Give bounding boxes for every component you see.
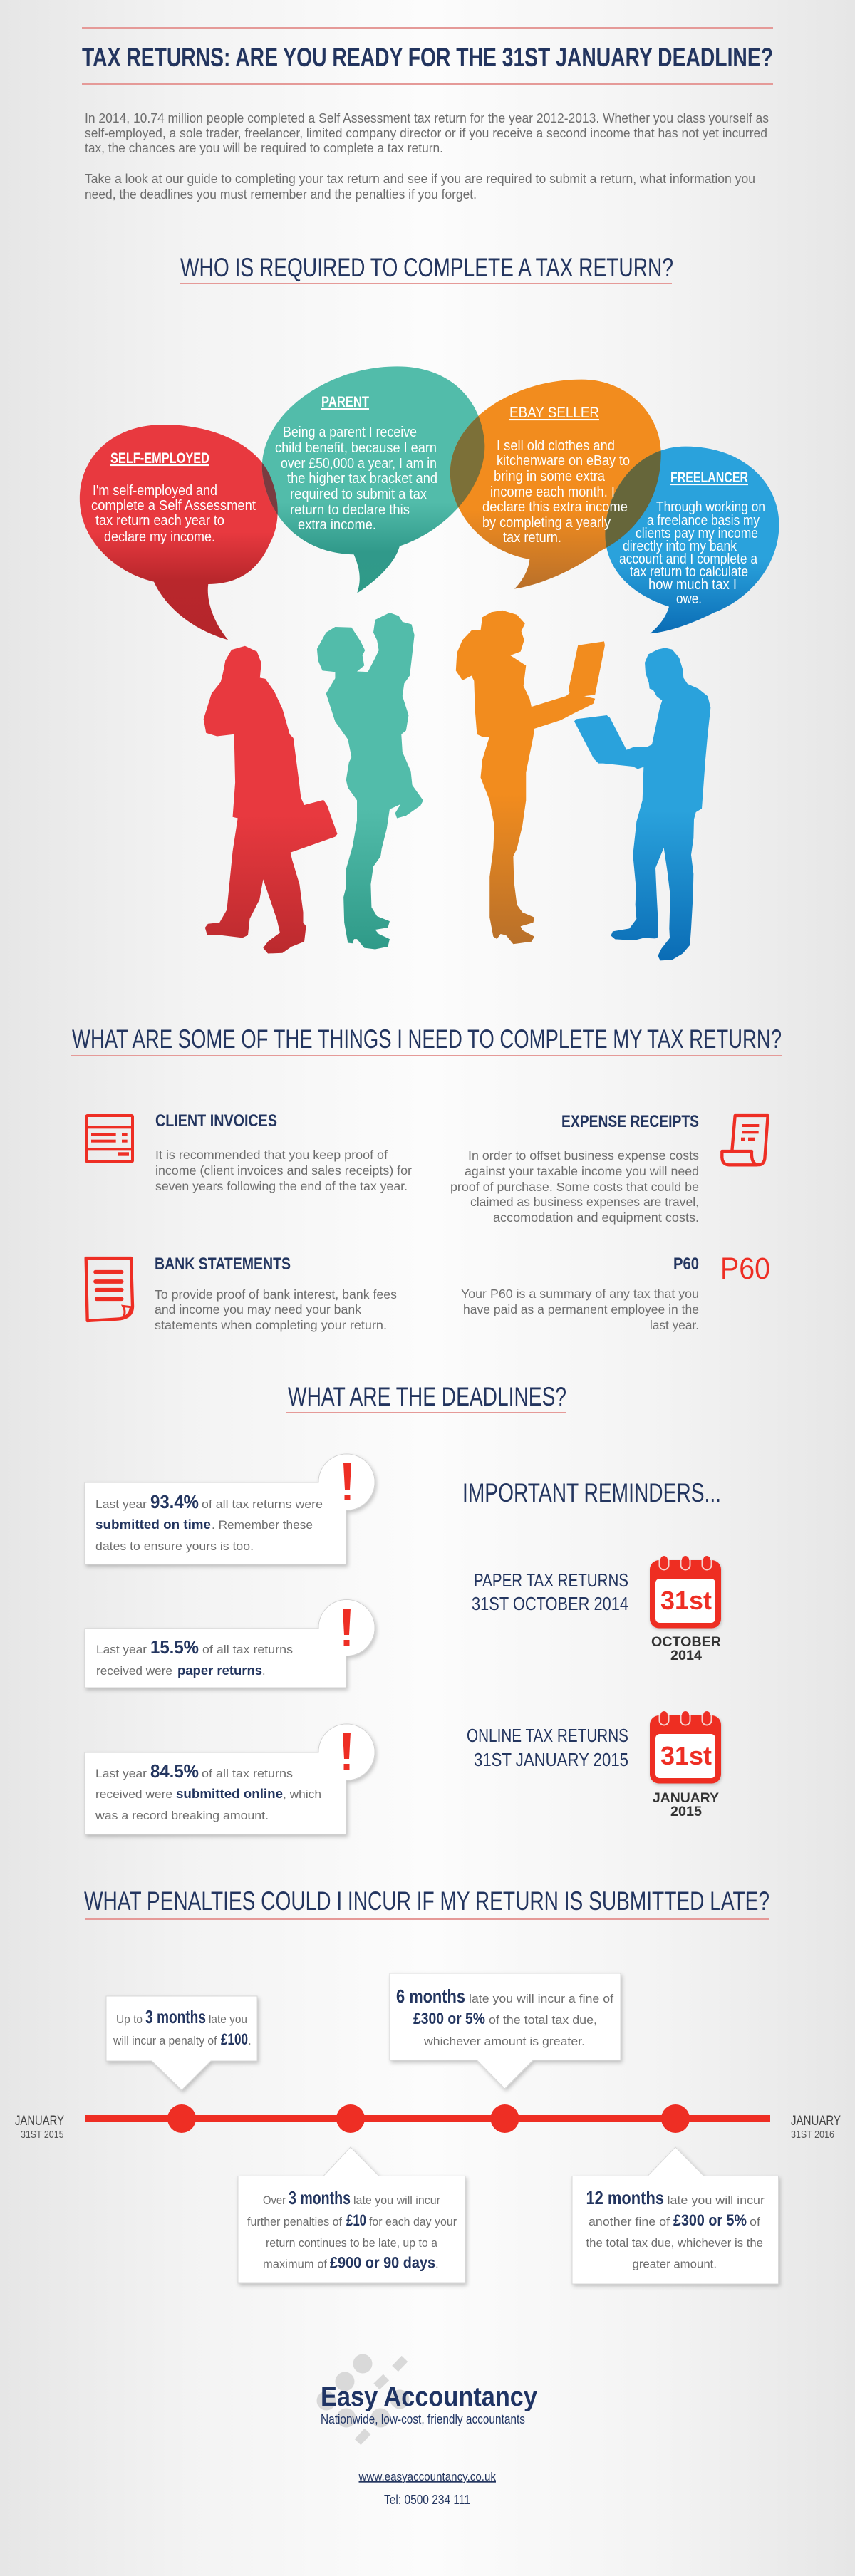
text: online tax returns date: 31ST JANUARY 2015 (474, 1749, 628, 1770)
heading: deadlines: WHAT ARE THE DEADLINES? (288, 1382, 566, 1411)
block: p60: last year. (650, 1318, 699, 1332)
bubble text: ebay seller: declare this extra income (482, 499, 628, 515)
icon: calendar january: JANUARY (653, 1791, 719, 1806)
bubble text: parent: Being a parent I receive (283, 425, 417, 440)
speech bubble shapes (80, 366, 779, 640)
callout: paper returns: . (262, 1665, 266, 1678)
callout: submitted online: received were (95, 1788, 172, 1801)
timeline (85, 2104, 770, 2133)
timeline start label: 31ST 2015 (21, 2129, 64, 2141)
callout: up to 3 months (106, 1996, 257, 2090)
callout: submitted online (85, 1724, 375, 1834)
bubble text: freelancer: owe. (676, 591, 702, 607)
timeline end label: 31ST 2016 (791, 2129, 834, 2141)
block: expense receipts: claimed as business expenses are travel, (470, 1195, 699, 1209)
bubble text: parent (275, 394, 437, 533)
bubble text: freelancer: directly into my bank (623, 539, 737, 554)
block: p60: have paid as a permanent employee in the (463, 1302, 699, 1316)
callout: 12 months: the total tax due, whichever is the (586, 2236, 763, 2250)
block: expense receipts (450, 1112, 699, 1225)
block: p60: P60 (673, 1255, 699, 1274)
block: p60: Your P60 is a summary of any tax that you (461, 1287, 699, 1301)
bubble text: ebay seller: by completing a yearly (482, 515, 611, 531)
icon: receipt (722, 1116, 768, 1165)
callout: over 3 months: 3 months (289, 2187, 351, 2208)
callout: over 3 months: maximum of (263, 2257, 327, 2271)
callout: over 3 months (238, 2147, 465, 2283)
block: bank statements: and income you may need your bank (155, 1302, 361, 1316)
callout: up to 3 months: £100 (221, 2030, 248, 2048)
icon: p60: P60 (720, 1252, 770, 1286)
silhouette: man with briefcase (204, 646, 337, 954)
bubble text: ebay seller: bring in some extra (494, 469, 606, 484)
block: p60 (461, 1255, 699, 1332)
callout: submitted on time: dates to ensure yours is too. (95, 1540, 254, 1553)
callout: over 3 months: Over (263, 2193, 286, 2207)
callout: 6 months: of the total tax due, (489, 2013, 597, 2027)
callout: up to 3 months: late you (209, 2012, 247, 2026)
block: expense receipts: In order to offset business expense costs (468, 1148, 699, 1163)
callout: up to 3 months: 3 months (145, 2006, 206, 2027)
callout: up to 3 months: will incur a penalty of (113, 2034, 217, 2047)
callout: submitted online: submitted online (176, 1787, 283, 1801)
icon: calendar january: 2015 (670, 1804, 702, 1819)
callout: 6 months: whichever amount is greater. (423, 2035, 585, 2048)
bubble text: freelancer: a freelance basis my (647, 513, 760, 529)
callout: 12 months: £300 or 5% (673, 2211, 747, 2229)
block: bank statements: To provide proof of bank interest, bank fees (155, 1287, 397, 1302)
callout: up to 3 months: . (248, 2034, 252, 2047)
block: client invoices (155, 1111, 412, 1193)
bubble text: freelancer: how much tax I (648, 577, 737, 593)
timeline start label: JANUARY (15, 2114, 64, 2129)
silhouette: woman with laptop (456, 611, 605, 944)
heading: who is required: WHO IS REQUIRED TO COMPLETE A TAX RETURN? (180, 253, 673, 282)
icon: invoice (86, 1116, 133, 1162)
callout: over 3 months: £900 or 90 days (330, 2254, 435, 2271)
timeline end label (791, 2114, 841, 2141)
block: client invoices: seven years following the end of the tax year. (155, 1179, 408, 1193)
text: online tax returns date: ONLINE TAX RETURNS (467, 1725, 628, 1746)
block: bank statements: statements when completing your return. (155, 1318, 387, 1332)
callout: over 3 months: . (435, 2257, 439, 2271)
bubble text: ebay seller: income each month. I (490, 484, 615, 500)
bubble text: parent: the higher tax bracket and (287, 471, 437, 487)
silhouette: parent holding child (317, 613, 423, 949)
callout: over 3 months: further penalties of (247, 2215, 342, 2228)
bubble text: ebay seller: kitchenware on eBay to (497, 453, 630, 469)
website link: www.easyaccountancy.co.uk (358, 2470, 496, 2483)
block: client invoices: income (client invoices and sales receipts) for (155, 1163, 412, 1178)
callout: paper returns: received were (96, 1665, 172, 1678)
callout: submitted online: Last year (95, 1767, 147, 1780)
bubble text: ebay seller: EBAY SELLER (509, 405, 599, 421)
callout: 12 months: late you will incur (667, 2193, 765, 2207)
callout: over 3 months: return continues to be late, up to a (266, 2236, 437, 2250)
callout: submitted online: was a record breaking amount. (95, 1809, 269, 1822)
text: online tax returns date (467, 1725, 628, 1770)
callout: up to 3 months: Up to (116, 2012, 142, 2026)
callout: 12 months: greater amount. (633, 2257, 717, 2271)
block: expense receipts: accomodation and equipment costs. (493, 1210, 699, 1225)
callout: submitted on time (85, 1454, 375, 1564)
callout: 12 months: 12 months (586, 2187, 664, 2208)
callout: 6 months: 6 months (396, 1985, 465, 2007)
bubble text: ebay seller: I sell old clothes and (497, 438, 615, 454)
icon: calendar october: OCTOBER (651, 1635, 721, 1650)
bubble text: parent: extra income. (298, 517, 376, 533)
icon: calendar january (650, 1711, 721, 1819)
block: bank statements (155, 1255, 397, 1332)
callout: 6 months: £300 or 5% (413, 2010, 485, 2027)
icon: calendar october (650, 1556, 721, 1663)
callout: submitted online: of all tax returns (202, 1767, 293, 1780)
bubble text: parent: child benefit, because I earn (275, 440, 437, 456)
text: paper tax returns date: 31ST OCTOBER 2014 (472, 1593, 628, 1614)
icon: calendar january: 31st (660, 1741, 712, 1770)
block: client invoices: CLIENT INVOICES (155, 1111, 277, 1131)
callout: 12 months (572, 2147, 778, 2284)
bubble text: self-employed: declare my income. (104, 529, 215, 545)
callout: over 3 months: for each day your (369, 2215, 457, 2228)
intro text: need, the deadlines you must remember and the penalties if you forget. (85, 187, 477, 202)
bubble text: parent: over £50,000 a year, I am in (281, 456, 437, 472)
intro text: tax, the chances are you will be required to complete a tax return. (85, 141, 443, 155)
callout: submitted online: 84.5% (150, 1760, 199, 1782)
bubble text: self-employed: complete a Self Assessment (91, 498, 256, 514)
icon: bank statement (86, 1258, 133, 1321)
callout: paper returns: paper returns (177, 1663, 262, 1678)
logo: easy accountancy (316, 2354, 537, 2442)
logo: easy accountancy: Easy Accountancy (321, 2382, 537, 2412)
bubble text: ebay seller (482, 405, 630, 546)
callout: 6 months (390, 1973, 621, 2089)
bubble text: freelancer: Through working on (656, 499, 765, 515)
bubble text: self-employed: SELF-EMPLOYED (110, 450, 209, 467)
callout: over 3 months: £10 (346, 2211, 366, 2229)
bubble text: freelancer: clients pay my income (636, 526, 758, 541)
callout: submitted on time: of all tax returns were (202, 1498, 323, 1511)
timeline end label: JANUARY (791, 2114, 841, 2129)
callout: submitted on time: 93.4% (150, 1491, 199, 1512)
bubble text: parent: required to submit a tax (290, 487, 427, 502)
bubble text: freelancer: tax return to calculate (630, 564, 748, 580)
bubble text: freelancer: account and I complete a (619, 551, 758, 567)
callout: paper returns (85, 1600, 375, 1688)
block: expense receipts: EXPENSE RECEIPTS (561, 1112, 699, 1131)
bubble text: parent: PARENT (321, 394, 369, 410)
bubble text: self-employed: tax return each year to (95, 513, 224, 529)
icon: calendar october: 31st (660, 1586, 712, 1615)
intro text: Take a look at our guide to completing your tax return and see if you are required to submit a return, what information you (85, 172, 755, 186)
bubble text: freelancer (619, 469, 765, 607)
intro text: In 2014, 10.74 million people completed a Self Assessment tax return for the year 2012-2013. Whether you class yourself as (85, 111, 769, 125)
heading: important reminders: IMPORTANT REMINDERS... (462, 1478, 721, 1507)
silhouette: man with laptop (574, 648, 710, 960)
block: bank statements: BANK STATEMENTS (155, 1255, 291, 1274)
bubble text: self-employed: I'm self-employed and (93, 483, 217, 499)
icon: calendar october: 2014 (670, 1648, 702, 1663)
callout: paper returns: 15.5% (150, 1636, 199, 1658)
callout: submitted on time: submitted on time (95, 1517, 211, 1532)
callout: submitted on time: Last year (95, 1498, 147, 1511)
callout: submitted online: , which (283, 1788, 321, 1801)
intro text (85, 111, 769, 202)
bubble overlaps (262, 416, 661, 548)
logo: easy accountancy: Nationwide, low-cost, friendly accountants (321, 2412, 525, 2426)
callout: submitted on time: . Remember these (212, 1519, 313, 1532)
bubble text: self-employed (91, 450, 256, 545)
text: paper tax returns date (472, 1569, 628, 1614)
block: expense receipts: against your taxable income you will need (465, 1164, 699, 1178)
telephone: Tel: 0500 234 111 (384, 2493, 470, 2507)
bubble text: parent: return to declare this (290, 502, 410, 518)
callout: 12 months: of (750, 2215, 760, 2228)
block: expense receipts: proof of purchase. Some costs that could be (450, 1180, 699, 1194)
bubble text: ebay seller: tax return. (503, 530, 561, 546)
timeline start label (15, 2114, 64, 2141)
callout: paper returns: of all tax returns (202, 1643, 293, 1656)
callout: paper returns: Last year (96, 1643, 147, 1656)
block: client invoices: It is recommended that you keep proof of (155, 1148, 388, 1162)
callout: 6 months: late you will incur a fine of (469, 1992, 613, 2005)
title (82, 27, 773, 85)
intro text: self-employed, a sole trader, freelancer, limited company director or if you receive a second income that has not yet incurred (85, 126, 767, 140)
callout: over 3 months: late you will incur (353, 2193, 440, 2207)
callout: 12 months: another fine of (589, 2215, 670, 2228)
text: paper tax returns date: PAPER TAX RETURNS (474, 1569, 628, 1591)
bubble text: freelancer: FREELANCER (670, 469, 748, 486)
